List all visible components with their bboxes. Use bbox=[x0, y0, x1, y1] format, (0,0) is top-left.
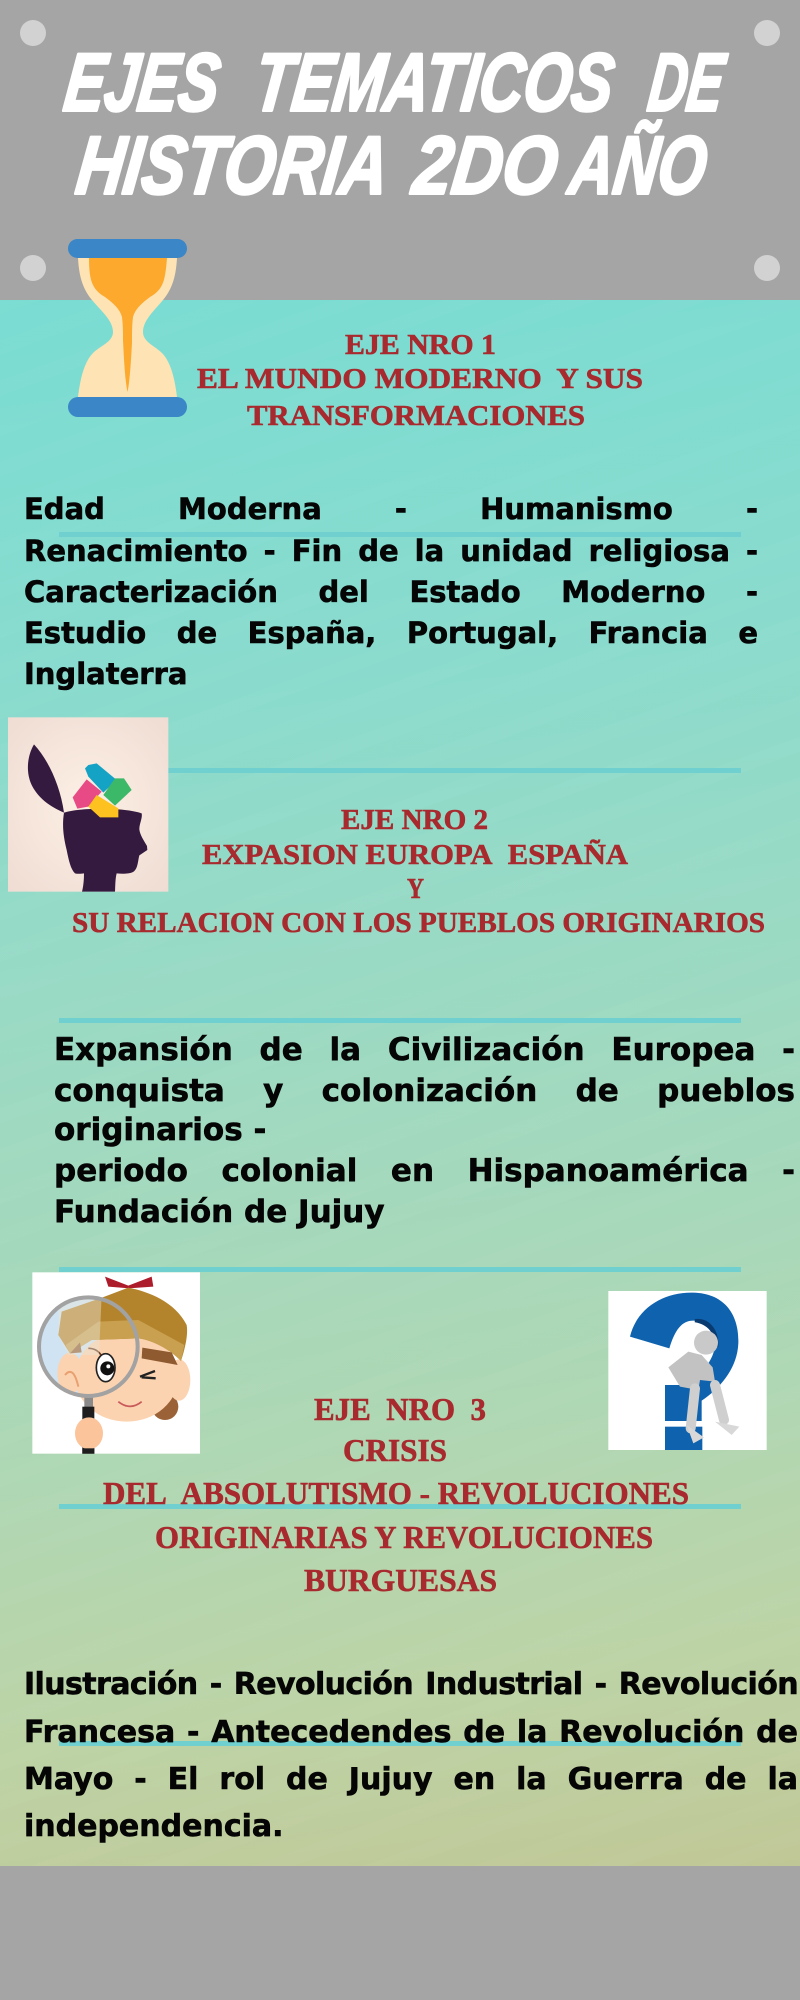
text block: eje 3 content: Ilustración - Revolución Industrial - Revolución bbox=[24, 1667, 798, 1702]
text block: eje 1 content: Edad Moderna - Humanismo - bbox=[24, 492, 758, 526]
heading: eje 2: SU RELACION CON LOS PUEBLOS ORIGINARIOS bbox=[72, 908, 765, 939]
heading: eje 3: EJE NRO 3 bbox=[314, 1391, 486, 1427]
icon: figure on question mark bbox=[608, 1291, 767, 1450]
title: AÑO bbox=[563, 120, 712, 211]
heading: eje 2: EJE NRO 2 bbox=[341, 805, 488, 836]
icon: hourglass bbox=[68, 239, 187, 417]
heading: eje 3: CRISIS bbox=[343, 1432, 447, 1468]
text block: eje 1 content bbox=[24, 492, 758, 691]
title: 2DO bbox=[407, 120, 563, 211]
heading: eje 1: TRANSFORMACIONES bbox=[247, 400, 585, 432]
text block: eje 2 content: Fundación de Jujuy bbox=[54, 1194, 385, 1230]
heading: eje 3: DEL ABSOLUTISMO - REVOLUCIONES bbox=[103, 1475, 689, 1511]
title: DE bbox=[644, 37, 730, 128]
title: TEMATICOS bbox=[250, 37, 619, 128]
text block: eje 1 content: Caracterización del Estado Moderno - bbox=[24, 575, 758, 609]
text block: eje 1 content: Estudio de España, Portugal, Francia e bbox=[24, 616, 758, 650]
heading: eje 3: ORIGINARIAS Y REVOLUCIONES bbox=[155, 1519, 653, 1555]
text block: eje 1 content: Renacimiento - Fin de la unidad religiosa - bbox=[24, 534, 758, 568]
header corner dots bbox=[20, 20, 780, 281]
icon: head with puzzle bbox=[8, 717, 168, 892]
heading: eje 1 bbox=[197, 329, 643, 432]
text block: eje 2 content: conquista y colonización de pueblos bbox=[54, 1073, 795, 1109]
text block: eje 1 content: Inglaterra bbox=[24, 657, 187, 691]
title: HISTORIA bbox=[72, 120, 394, 211]
heading: eje 1: EJE NRO 1 bbox=[345, 329, 496, 361]
text block: eje 2 content: originarios - bbox=[54, 1112, 266, 1148]
heading: eje 2: EXPASION EUROPA ESPAÑA bbox=[202, 840, 629, 871]
heading: eje 2 bbox=[72, 805, 765, 939]
text block: eje 2 content: periodo colonial en Hispanoamérica - bbox=[54, 1153, 795, 1189]
text block: eje 2 content: Expansión de la Civilización Europea - bbox=[54, 1032, 795, 1068]
panel: gradient content background bbox=[0, 300, 800, 1866]
heading: eje 1: EL MUNDO MODERNO Y SUS bbox=[197, 363, 643, 395]
title: EJES bbox=[60, 37, 225, 128]
icon: detective with magnifying glass bbox=[32, 1272, 200, 1454]
text block: eje 2 content bbox=[54, 1032, 795, 1230]
text block: eje 3 content: Francesa - Antecedendes de la Revolución de bbox=[24, 1715, 798, 1750]
heading: eje 3: BURGUESAS bbox=[304, 1562, 497, 1598]
text block: eje 3 content: Mayo - El rol de Jujuy en la Guerra de la bbox=[24, 1762, 798, 1797]
heading: eje 3 bbox=[103, 1391, 689, 1598]
heading: eje 2: Y bbox=[407, 874, 424, 905]
title bbox=[60, 37, 730, 211]
text block: eje 3 content bbox=[24, 1667, 798, 1844]
text block: eje 3 content: independencia. bbox=[24, 1809, 284, 1844]
